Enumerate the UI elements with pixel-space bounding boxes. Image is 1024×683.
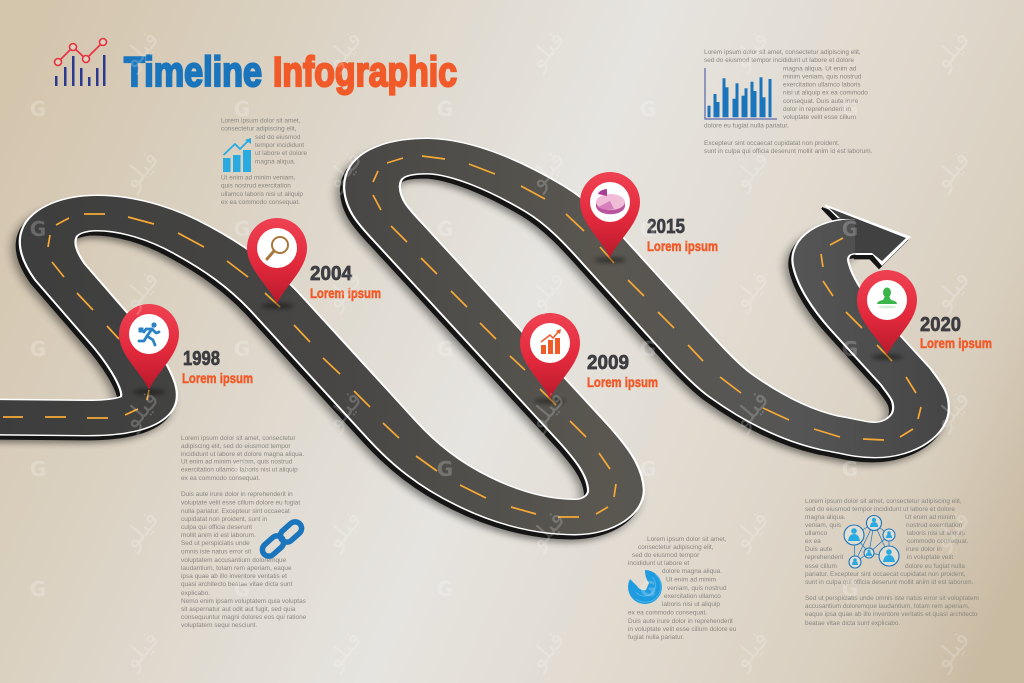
text block: bottom left with link icon: Ut enim ad minim veniam, quis nostrud	[181, 459, 293, 466]
text block: bottom right with network icon: esse cillum	[805, 563, 837, 570]
watermark G marks: G	[640, 337, 656, 361]
watermark logos: فیلو	[521, 385, 571, 436]
road centre dashes	[3, 156, 921, 517]
icon: green person	[877, 288, 897, 308]
text block: bottom left with link icon: ex ea commodo consequat.	[181, 475, 260, 482]
watermark G marks	[30, 97, 858, 601]
text block: bottom centre with donut icon: dolore magna aliqua.	[662, 568, 722, 575]
watermark logos: فیلو	[115, 145, 165, 196]
road black kerb	[0, 160, 918, 521]
text block: bottom right with network icon: sunt in culpa qui officia deserunt mollit anim id est laborum.	[805, 579, 974, 586]
text block: bottom right with network icon: Ut enim ad minim	[905, 514, 955, 521]
text block: bottom right with network icon: dolore eu fugiat nulla	[905, 563, 965, 570]
text block: bottom right with network icon: reprehenderit	[805, 554, 844, 561]
label 2015: 2015	[647, 216, 685, 238]
watermark logos: فیلو	[318, 625, 368, 676]
watermark logos: فیلو	[318, 505, 368, 556]
icon: orange bars with arrow	[541, 329, 561, 354]
text block: top right with bar chart: voluptate velit esse cillum	[783, 114, 856, 121]
watermark logos: فیلو	[725, 505, 775, 556]
text block: bottom centre with donut icon: fugiat nulla pariatur.	[628, 634, 684, 641]
watermark G marks: G	[640, 577, 656, 601]
text block: bottom left with link icon: Sed ut perspiciatis unde	[181, 540, 250, 547]
label 2020	[920, 314, 992, 351]
text block: top left with rising chart icon: consectetur adipiscing elit,	[221, 126, 297, 133]
text block: bottom right with network icon: commodo consequat.	[907, 538, 969, 545]
text block: top left with rising chart icon: ex ea commodo consequat.	[221, 199, 300, 206]
text block: top right with bar chart: dolor in reprehenderit in	[783, 106, 851, 113]
watermark G marks: G	[842, 217, 858, 241]
icon: chain link	[260, 519, 304, 559]
text block: bottom centre with donut icon: Duis aute irure dolor in reprehenderit	[628, 618, 733, 625]
text block: top right with bar chart: consequat. Duis aute irure	[783, 98, 859, 105]
text block: top left with rising chart icon: sed do eiusmod	[255, 134, 301, 141]
text block: bottom right with network icon: pariatur. Excepteur sint occaecat cupidatat non proident,	[805, 571, 966, 578]
watermark logos: فیلو	[521, 625, 571, 676]
watermark logos: فیلو	[926, 625, 976, 676]
watermark logos: فیلو	[115, 625, 165, 676]
watermark logos: فیلو	[115, 265, 165, 316]
pin 2004	[247, 218, 307, 309]
text block: bottom left with link icon: exercitation ullamco laboris nisi ut aliquip	[181, 467, 298, 474]
text block: bottom centre with donut icon: in voluptate velit esse cillum dolore eu	[628, 626, 737, 633]
watermark logos: فیلو	[318, 25, 368, 76]
watermark logos: فیلو	[926, 265, 976, 316]
icon: running man	[139, 322, 159, 345]
watermark logos: فیلو	[725, 145, 775, 196]
text block: bottom right with network icon: Lorem ipsum dolor sit amet, consectetur adipiscing elit,	[805, 498, 962, 505]
text block: bottom centre with donut icon: exercitation ullamco	[664, 593, 721, 600]
watermark G marks: G	[437, 457, 453, 481]
watermark logos: فیلو	[521, 145, 571, 196]
text block: bottom centre with donut icon: sed do eiusmod tempor	[632, 552, 700, 559]
text block: bottom left with link icon: voluptate velit esse cillum dolore eu fugiat	[181, 500, 300, 506]
watermark logos: فیلو	[521, 265, 571, 316]
pin 2009	[520, 313, 580, 404]
icon: donut chart	[628, 570, 662, 604]
text block: top right with bar chart: minim veniam, quis nostrud	[783, 74, 862, 81]
label 2004	[310, 263, 381, 301]
text block: top left with rising chart icon: tempor incididunt	[255, 142, 304, 149]
text block: bottom left with link icon	[181, 435, 307, 629]
watermark G marks: G	[437, 577, 453, 601]
text block: bottom centre with donut icon: consectetur adipiscing elit,	[638, 544, 714, 551]
watermark logos: فیلو	[725, 385, 775, 436]
text block: top right with bar chart: magna aliqua. Ut enim ad	[783, 66, 857, 72]
text block: top left with rising chart icon: ullamco laboris nisi ut aliquip	[221, 191, 303, 198]
text block: bottom right with network icon: eaque ipsa quae ab illo inventore veritatis et quasi architecto	[805, 611, 978, 618]
text block: bottom centre with donut icon	[628, 536, 737, 641]
text block: bottom right with network icon: nostrud exercitation	[906, 522, 963, 529]
text block: bottom left with link icon: ipsa quae ab illo inventore veritatis et	[181, 573, 287, 580]
text block: bottom centre with donut icon: laboris nisi ut aliquip	[662, 601, 720, 608]
watermark logos: فیلو	[725, 25, 775, 76]
label 2015	[647, 216, 718, 254]
text block: bottom left with link icon: cupidatat non proident, sunt in	[181, 516, 268, 523]
text block: bottom left with link icon: laudantium, totam rem aperiam, eaque	[181, 565, 292, 572]
label 2009: Lorem ipsum	[587, 375, 658, 390]
text block: bottom centre with donut icon: Ut enim ad minim	[666, 577, 716, 584]
pin 2015	[580, 172, 640, 263]
text block: bottom left with link icon: Lorem ipsum dolor sit amet, consectetur	[181, 435, 296, 442]
watermark logos: فیلو	[521, 25, 571, 76]
text block: bottom right with network icon	[805, 498, 979, 627]
watermark G marks: G	[234, 577, 250, 601]
text block: top right with bar chart	[704, 49, 873, 155]
text block: bottom right with network icon: ullamco	[805, 530, 828, 537]
text block: bottom right with network icon: magna aliqua.	[805, 514, 846, 521]
watermark G marks: G	[640, 217, 656, 241]
text block: top left with rising chart icon: magna aliqua.	[255, 158, 296, 166]
label 1998	[182, 348, 253, 386]
text block: top right with bar chart: sed do eiusmod tempor incididunt ut labore et dolore	[704, 57, 854, 64]
road soft shadow	[0, 163, 915, 524]
text block: bottom left with link icon: voluptatem sequi nesciunt.	[181, 622, 257, 629]
title: Timeline	[124, 48, 262, 95]
text block: bottom left with link icon: adipiscing elit, sed do eiusmod tempor	[181, 443, 291, 450]
road white edge lines	[0, 156, 921, 517]
text block: bottom left with link icon: incididunt ut labore et dolore magna aliqua.	[181, 451, 304, 458]
icon: rising bars	[223, 138, 251, 172]
watermark G marks: G	[640, 97, 656, 121]
label 2009: 2009	[587, 352, 629, 374]
title icon: chart with trend line	[54, 38, 106, 86]
text block: top left with rising chart icon: Lorem ipsum dolor sit amet,	[221, 118, 301, 124]
text block: top right with bar chart: sunt in culpa qui officia deserunt mollit anim id est laborum.	[704, 148, 873, 155]
text block: bottom right with network icon: ex ea	[805, 538, 821, 545]
watermark logos: فیلو	[926, 145, 976, 196]
text block: top left with rising chart icon: ut labore et dolore	[255, 150, 307, 157]
text block: bottom right with network icon: laboris nisi ut aliquip	[907, 530, 965, 537]
watermark logos: فیلو	[926, 385, 976, 436]
label 2004: 2004	[310, 263, 353, 285]
text block: bottom left with link icon: mollit anim id est laborum.	[181, 532, 256, 539]
watermark G marks: G	[234, 337, 250, 361]
label 1998: 1998	[183, 348, 220, 370]
watermark G marks: G	[842, 577, 858, 601]
label 1998: Lorem ipsum	[182, 371, 253, 386]
text block: bottom right with network icon: in voluptate velit	[907, 554, 953, 561]
watermark G marks: G	[437, 337, 453, 361]
text block: top left with rising chart icon: Ut enim ad minim veniam,	[221, 174, 296, 181]
text block: bottom left with link icon: quasi architecto beatae vitae dicta sunt	[181, 581, 293, 588]
watermark G marks: G	[30, 577, 46, 601]
watermark G marks: G	[437, 217, 453, 241]
watermark G marks: G	[842, 457, 858, 481]
watermark G marks: G	[30, 337, 46, 361]
text block: bottom centre with donut icon: incididunt ut labore et	[628, 560, 689, 567]
text block: top left with rising chart icon: quis nostrud exercitation	[221, 182, 291, 190]
watermark G marks: G	[437, 97, 453, 121]
road	[0, 156, 921, 524]
text block: bottom left with link icon: omnis iste natus error sit	[181, 549, 251, 556]
text block: top right with bar chart: Lorem ipsum dolor sit amet, consectetur adipiscing elit,	[704, 49, 861, 56]
watermark G marks: G	[234, 217, 250, 241]
label 2020: 2020	[920, 314, 961, 336]
watermark logos: فیلو	[521, 505, 571, 556]
watermark logos: فیلو	[926, 505, 976, 556]
road surface	[0, 156, 921, 517]
text block: bottom right with network icon: sed do eiusmod tempor incididunt ut labore et dolore	[805, 506, 955, 513]
title: Infographic	[273, 48, 457, 95]
watermark logos: فیلو	[926, 25, 976, 76]
text block: bottom right with network icon: accusantium doloremque laudantium, totam rem aperiam,	[805, 603, 970, 610]
watermark G marks: G	[842, 97, 858, 121]
text block: bottom centre with donut icon: ex ea commodo consequat.	[628, 610, 707, 616]
watermark logos: فیلو	[115, 385, 165, 436]
text block: bottom right with network icon: irure dolor in	[906, 546, 942, 553]
text block: bottom left with link icon: sit aspernatur aut odit aut fugit, sed quia	[181, 606, 296, 613]
text block: top right with bar chart: Excepteur sint occaecat cupidatat non proident,	[704, 140, 840, 147]
watermark G marks: G	[30, 97, 46, 121]
icon: people network	[844, 516, 899, 568]
text block: bottom right with network icon: Duis aute	[805, 546, 833, 553]
text block: bottom left with link icon: voluptatem accusantium doloremque	[181, 557, 287, 564]
watermark logos: فیلو	[318, 265, 368, 316]
text block: bottom centre with donut icon: veniam, quis nostrud	[667, 585, 727, 592]
text block: bottom left with link icon: explicabo.	[181, 590, 210, 597]
watermark G marks: G	[640, 457, 656, 481]
label 2020: Lorem ipsum	[920, 336, 992, 351]
watermark G marks: G	[30, 457, 46, 481]
pin 2020	[857, 270, 917, 360]
watermark G marks: G	[842, 337, 858, 361]
text block: bottom centre with donut icon: Lorem ipsum dolor sit amet,	[647, 536, 727, 543]
text block: bottom left with link icon: Nemo enim ipsam voluptatem quia voluptas	[181, 598, 306, 605]
text block: top left with rising chart icon	[221, 118, 307, 206]
pin 1998	[119, 304, 179, 395]
title	[124, 48, 457, 95]
label 2009	[587, 352, 658, 390]
watermark logos: فیلو	[318, 145, 368, 196]
bar chart	[705, 68, 777, 119]
watermark G marks: G	[234, 97, 250, 121]
icon: pie chart	[596, 189, 625, 214]
text block: bottom left with link icon: Duis aute irure dolor in reprehenderit in	[181, 491, 293, 498]
label 2004: Lorem ipsum	[310, 286, 381, 301]
text block: bottom right with network icon: veniam, quis	[805, 522, 841, 529]
text block: bottom left with link icon: culpa qui officia deserunt	[181, 524, 252, 531]
text block: bottom right with network icon: beatae vitae dicta sunt explicabo.	[805, 620, 900, 627]
icon: magnifier	[267, 237, 288, 259]
text block: bottom left with link icon: consequuntur magni dolores eos qui ratione	[181, 614, 307, 621]
watermark logos: فیلو	[318, 385, 368, 436]
watermark G marks: G	[234, 457, 250, 481]
text block: bottom left with link icon: nulla pariatur. Excepteur sint occaecat	[181, 508, 290, 515]
text block: top right with bar chart: nisi ut aliquip ex ea commodo	[783, 90, 868, 97]
watermark logos: فیلو	[725, 625, 775, 676]
watermark logos: فیلو	[725, 265, 775, 316]
text block: bottom right with network icon: Sed ut perspiciatis unde omnis iste natus error sit voluptatem	[805, 595, 979, 602]
watermark logos: فیلو	[115, 505, 165, 556]
text block: top right with bar chart: exercitation ullamco laboris	[783, 82, 861, 88]
label 2015: Lorem ipsum	[647, 239, 718, 254]
watermark logos: فیلو	[115, 25, 165, 76]
watermark G marks: G	[30, 217, 46, 241]
text block: top right with bar chart: dolore eu fugiat nulla pariatur.	[704, 122, 789, 130]
